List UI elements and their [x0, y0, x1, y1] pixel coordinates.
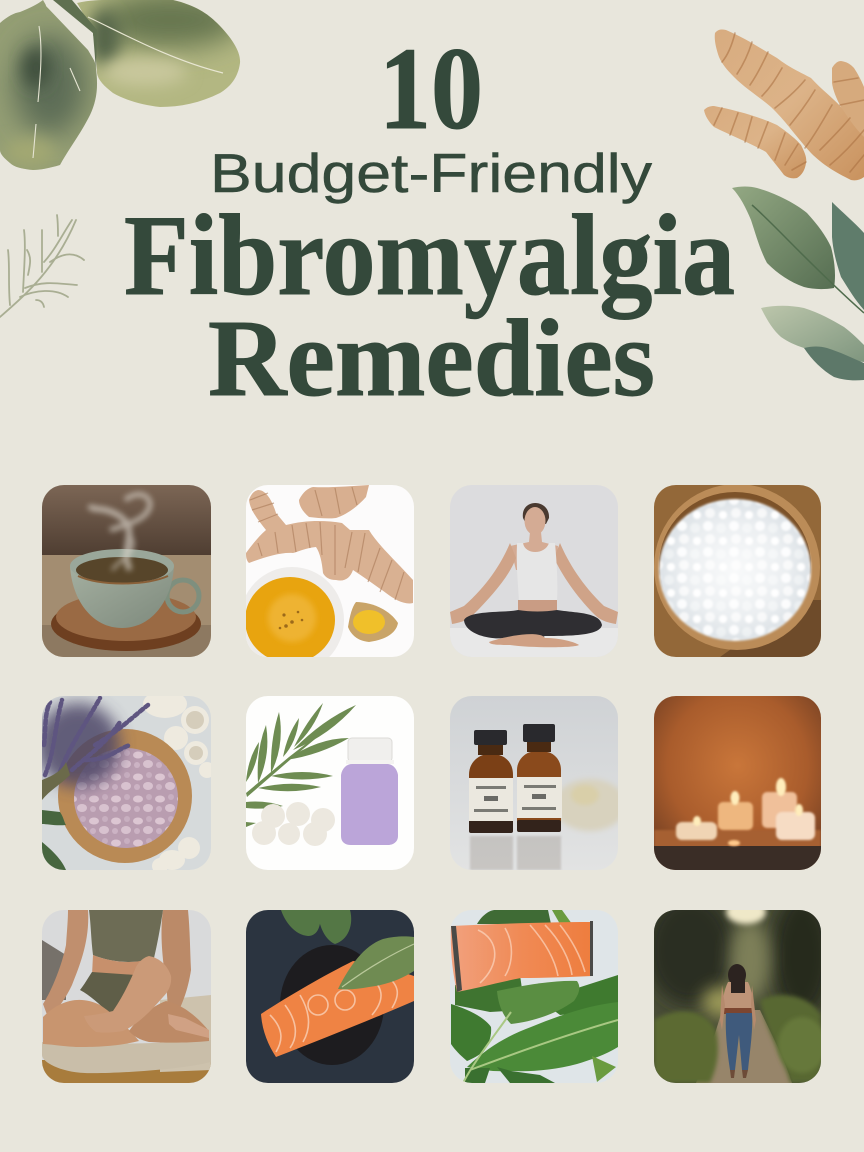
- tile: salmon on dark plate: [246, 910, 414, 1083]
- left leaf: [0, 0, 100, 172]
- tile: ginger tea: [246, 485, 414, 657]
- decoration: herb sprig left: [0, 215, 84, 317]
- title: [124, 23, 735, 419]
- tile: candles: [654, 696, 821, 870]
- title: Remedies: Remedies: [208, 297, 655, 419]
- subtitle: Budget-Friendly: Budget-Friendly: [210, 142, 653, 204]
- tile: salmon on greens: [450, 910, 618, 1083]
- tile: epsom salt bowl: [654, 484, 821, 657]
- decoration: large watercolor leaves top left: [0, 0, 250, 172]
- title number: 10: [379, 23, 483, 154]
- tile: supplement bottle: [246, 696, 414, 870]
- white candles and stones: [143, 696, 211, 870]
- purple bottle: [341, 764, 398, 845]
- tile: yoga pose: [450, 485, 618, 657]
- tile: herbal tea: [42, 485, 211, 657]
- leaf sprig: [246, 703, 356, 827]
- title: Fibromyalgia: Fibromyalgia: [124, 192, 735, 320]
- tile: forest walk: [654, 910, 821, 1083]
- decoration: green leaves right: [732, 186, 864, 380]
- tile: lavender bath salts: [42, 696, 211, 870]
- tile: essential oil bottles: [450, 696, 626, 870]
- tile: seated meditation: [42, 910, 211, 1083]
- white softgels: [252, 802, 335, 846]
- right leaf: [77, 0, 240, 107]
- decoration: ginger roots top right: [704, 29, 864, 180]
